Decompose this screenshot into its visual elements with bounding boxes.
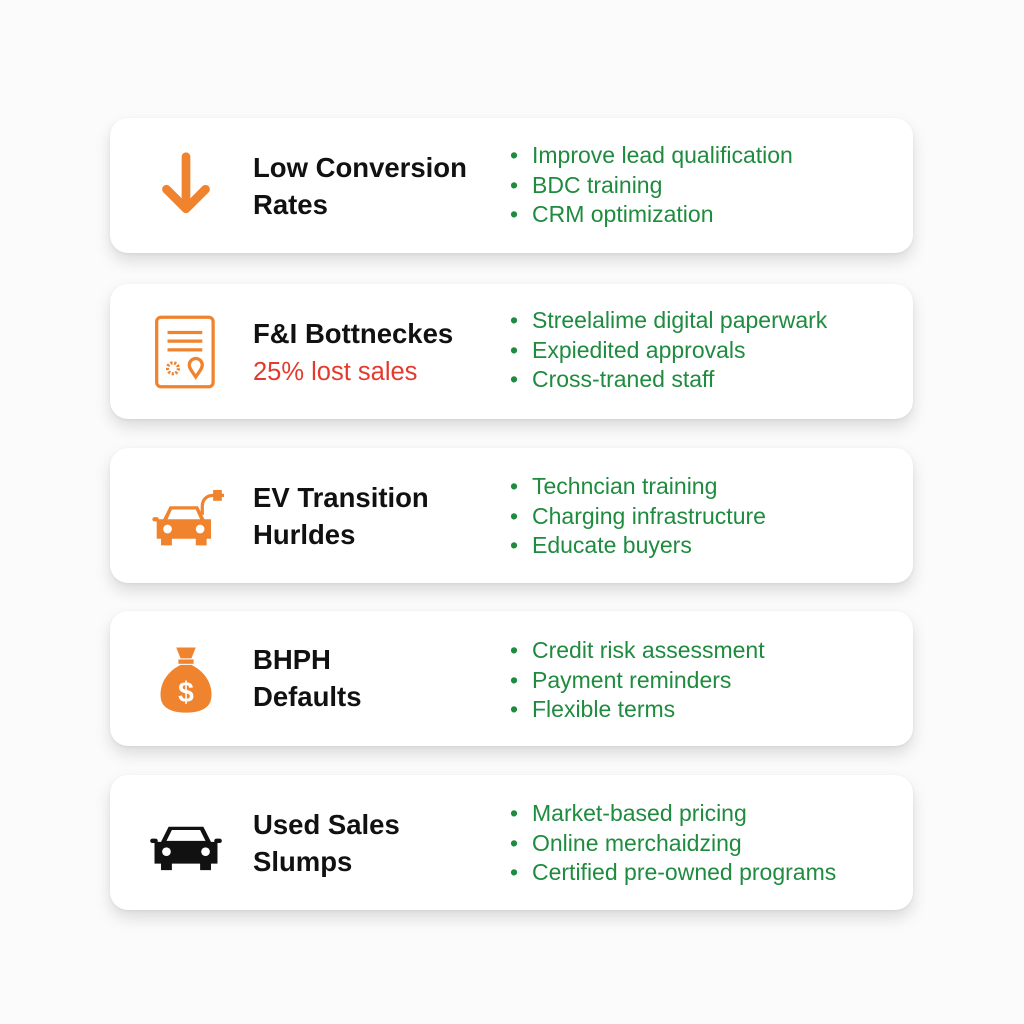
bullets: Charging infrastructure (532, 502, 766, 528)
bullets (510, 800, 836, 885)
bullets: Payment reminders (532, 666, 731, 692)
bullets: Market-based pricing (532, 800, 747, 826)
title (253, 644, 362, 712)
title: Rates (253, 189, 328, 220)
bullets: Improve lead qualification (532, 142, 793, 168)
bullets: Expiedited approvals (532, 336, 746, 362)
title: Slumps (253, 846, 352, 877)
card: EV transition (110, 448, 913, 583)
title: 25% lost sales (253, 358, 417, 386)
bullets (510, 473, 766, 558)
bullets: Online merchaidzing (532, 830, 742, 856)
bullets: Cross-traned staff (532, 366, 714, 392)
icon: document (155, 316, 215, 388)
title (253, 318, 453, 386)
title: EV Transition (253, 482, 429, 513)
icon: money bag (160, 648, 212, 713)
card: used sales slumps (110, 775, 913, 910)
bullets (510, 142, 793, 227)
bullets: Streelalime digital paperwark (532, 307, 827, 333)
title (253, 482, 429, 550)
icon: car (150, 826, 222, 870)
card: low conversion rates (110, 118, 913, 253)
icon: money bag: $ (178, 676, 194, 708)
card: BHPH defaults (110, 611, 913, 746)
title: Low Conversion (253, 152, 467, 183)
bullets: Educate buyers (532, 532, 692, 558)
icon: electric car (152, 490, 224, 546)
bullets: Certified pre-owned programs (532, 859, 836, 885)
title: Defaults (253, 681, 362, 712)
bullets: Flexible terms (532, 696, 675, 722)
bullets: Credit risk assessment (532, 637, 765, 663)
bullets (510, 307, 828, 392)
title: Hurldes (253, 519, 355, 550)
bullets: Techncian training (532, 473, 717, 499)
bullets: BDC training (532, 172, 662, 198)
title: Used Sales (253, 809, 400, 840)
card: F&I bottlenecks (110, 284, 913, 419)
bullets: CRM optimization (532, 201, 714, 227)
bullets (510, 637, 765, 722)
icon: down arrow (162, 152, 210, 214)
title: BHPH (253, 644, 331, 675)
title (253, 809, 400, 877)
title (253, 152, 467, 220)
title: F&I Bottneckes (253, 318, 453, 349)
